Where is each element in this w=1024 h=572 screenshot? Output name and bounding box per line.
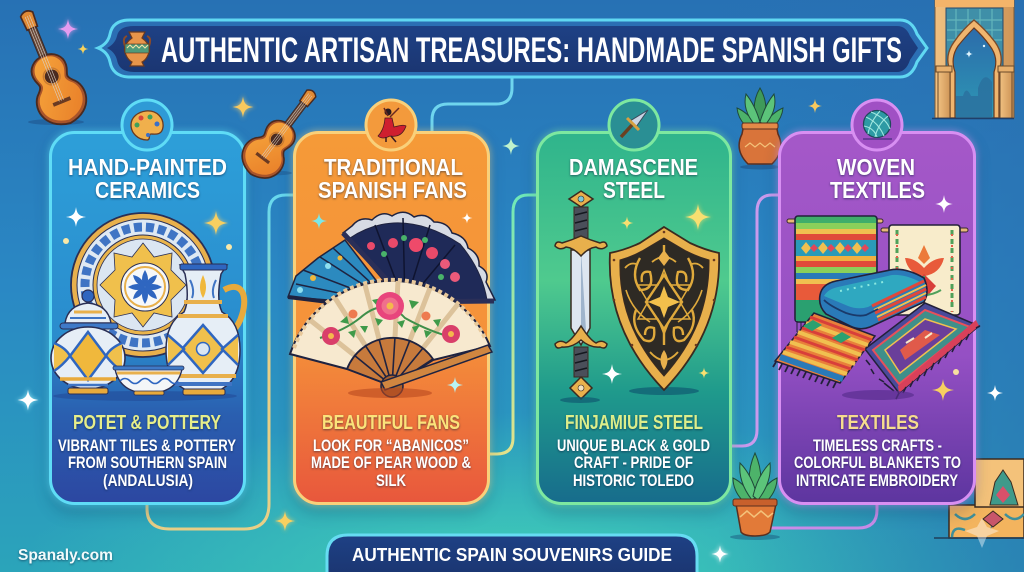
decoration: guitar top left bbox=[2, 2, 94, 132]
dark lace fan bbox=[343, 212, 495, 305]
title banner bbox=[98, 20, 927, 77]
illustration: patterned carpet bbox=[865, 303, 980, 399]
decoration: potted plant bottom bbox=[730, 453, 780, 540]
body text: ceramics: VIBRANT TILES & POTTERY bbox=[58, 437, 236, 455]
body text: steel: UNIQUE BLACK & GOLD bbox=[557, 437, 710, 455]
body text: fans: MADE OF PEAR WOOD & bbox=[311, 454, 471, 472]
heading: damascene steel bbox=[569, 154, 698, 203]
heading: damascene steel: DAMASCENE bbox=[569, 154, 698, 180]
icon: flamenco dancer bbox=[366, 100, 416, 150]
body text: textiles bbox=[794, 437, 961, 490]
heading: damascene steel: STEEL bbox=[603, 177, 665, 203]
body text: fans: SILK bbox=[376, 472, 406, 490]
cream fan bbox=[290, 281, 490, 386]
icon: dagger bbox=[609, 100, 659, 150]
body text: steel: HISTORIC TOLEDO bbox=[573, 472, 694, 490]
label: finjamiue steel: FINJAMIUE STEEL bbox=[565, 412, 703, 434]
footer banner bbox=[327, 535, 697, 572]
illustration: striped hanging rug bbox=[787, 216, 883, 332]
panel shadows bbox=[49, 136, 976, 514]
footer text: AUTHENTIC SPAIN SOUVENIRS GUIDE bbox=[352, 544, 672, 565]
illustration: striped blanket bbox=[773, 313, 875, 388]
decoration: tile panel bottom right bbox=[934, 459, 1024, 548]
icon: palette bbox=[122, 100, 172, 150]
body text: ceramics: FROM SOUTHERN SPAIN bbox=[68, 454, 227, 472]
brand text: Spanaly.com bbox=[18, 547, 113, 564]
body text: fans bbox=[311, 437, 471, 490]
shadow under fan bbox=[348, 388, 432, 398]
connector: textiles to plant bbox=[770, 504, 877, 528]
body text: textiles: TIMELESS CRAFTS - bbox=[813, 437, 942, 455]
heading: traditional Spanish fans: TRADITIONAL bbox=[324, 154, 463, 180]
illustration: embroidered hanging cloth bbox=[881, 225, 968, 315]
panel: woven textiles bbox=[773, 100, 980, 504]
sword shadow bbox=[560, 397, 600, 403]
heading: woven textiles: TEXTILES bbox=[830, 177, 925, 203]
body text: ceramics: (ANDALUSIA) bbox=[103, 472, 193, 490]
body text: fans: LOOK FOR “ABANICOS” bbox=[313, 437, 469, 455]
panel: traditional Spanish fans bbox=[288, 100, 495, 504]
bowl bbox=[115, 369, 182, 392]
body text: steel bbox=[557, 437, 710, 490]
heading: hand-painted ceramics: CERAMICS bbox=[95, 177, 200, 203]
lidded jar bbox=[65, 303, 111, 323]
heading: hand-painted ceramics bbox=[68, 154, 227, 203]
label: textiles: TEXTILES bbox=[837, 412, 919, 434]
panel: hand-painted ceramics bbox=[50, 100, 244, 504]
illustration: three fans bbox=[288, 212, 495, 397]
body text: textiles: COLORFUL BLANKETS TO bbox=[794, 454, 961, 472]
illustration: damascene shield bbox=[610, 227, 719, 395]
heading: woven textiles: WOVEN bbox=[837, 154, 915, 180]
connector: steel to textiles bbox=[732, 195, 779, 446]
illustration: ceramics set bbox=[51, 213, 244, 401]
body text: textiles: INTRICATE EMBROIDERY bbox=[796, 472, 958, 490]
connector: ceramics to fans bbox=[147, 195, 294, 529]
heading: woven textiles bbox=[830, 154, 925, 203]
connector: title to fans panel bbox=[432, 78, 512, 132]
jug bbox=[224, 287, 244, 332]
body text: steel: CRAFT - PRIDE OF bbox=[574, 454, 693, 472]
icon: amphora vase bbox=[124, 32, 150, 66]
label: beautiful fans: BEAUTIFUL FANS bbox=[322, 412, 460, 434]
heading: traditional Spanish fans: SPANISH FANS bbox=[318, 177, 467, 203]
illustration: sword bbox=[555, 191, 607, 399]
heading: traditional Spanish fans bbox=[318, 154, 467, 203]
label: potet and pottery: POTET & POTTERY bbox=[73, 412, 222, 434]
textiles shadow bbox=[842, 390, 914, 400]
decoration: potted plant top bbox=[737, 88, 783, 170]
decoration: Moorish arch bbox=[932, 0, 1014, 118]
panel: damascene steel bbox=[538, 100, 730, 504]
body text: ceramics bbox=[58, 437, 236, 490]
decoration: small guitar between panels bbox=[234, 78, 330, 187]
icon: yarn ball bbox=[852, 100, 902, 150]
heading: hand-painted ceramics: HAND-PAINTED bbox=[68, 154, 227, 180]
blue fan bbox=[288, 240, 395, 305]
connector: fans to steel bbox=[490, 195, 537, 454]
illustration: folded blanket bbox=[820, 269, 927, 329]
